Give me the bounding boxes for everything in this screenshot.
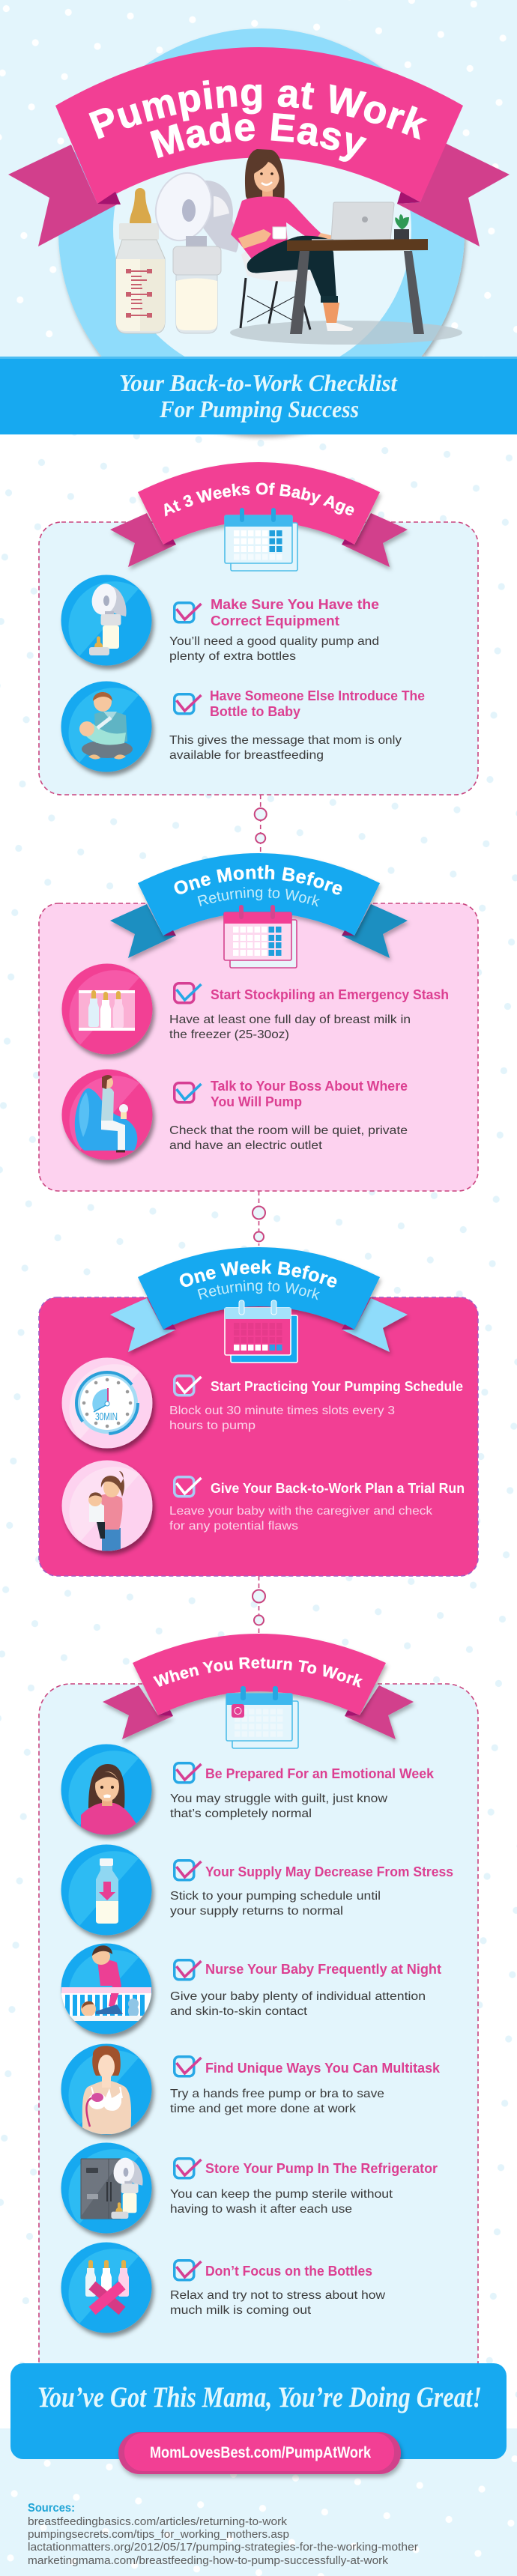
- item body: for any potential flaws: [169, 1520, 298, 1533]
- checkbox: [175, 984, 201, 1003]
- ribbon tail right: [397, 143, 510, 246]
- item body: [170, 1890, 381, 1918]
- item body: the freezer (25-30oz): [169, 1028, 289, 1041]
- checkbox: [175, 2261, 201, 2280]
- background: footer area: [0, 2428, 517, 2576]
- checkbox: [175, 1763, 201, 1783]
- item heading: [211, 597, 379, 628]
- closing banner: [10, 2363, 507, 2474]
- checkbox: [175, 2057, 201, 2076]
- section ribbon: Returning to Work: [198, 887, 320, 906]
- icon: father feeding baby: [61, 682, 151, 772]
- icon: refrigerator and pump: [61, 2142, 151, 2234]
- item body: that’s completely normal: [170, 1807, 312, 1820]
- link button: MomLovesBest.com/PumpAtWork: [150, 2444, 371, 2461]
- section ribbon: [110, 1247, 409, 1356]
- sources: breastfeedingbasics.com/articles/returning-to-work: [28, 2515, 288, 2528]
- connector 3: [253, 1576, 265, 1634]
- item body: Relax and try not to stress about how: [170, 2289, 385, 2302]
- icon: worried mother: [61, 1744, 151, 1836]
- icon: bottle with down arrow: [61, 1844, 151, 1936]
- section 1: at 3 weeks: [38, 462, 479, 795]
- ribbon main band: [55, 47, 463, 204]
- item body: [169, 1124, 408, 1152]
- item body: Try a hands free pump or bra to save: [170, 2088, 384, 2100]
- item heading: Make Sure You Have the: [211, 597, 379, 612]
- checkbox: [175, 1960, 201, 1980]
- icon: mother with child: [61, 1461, 153, 1552]
- section ribbon: [110, 462, 409, 571]
- subtitle band: [0, 357, 517, 434]
- illustration: baby bottle: [116, 188, 165, 333]
- item heading: Find Unique Ways You Can Multitask: [205, 2061, 441, 2076]
- item body: [170, 2289, 385, 2317]
- icon: mother at crib: [61, 1943, 151, 2036]
- item heading: Don’t Focus on the Bottles: [205, 2264, 372, 2279]
- item heading: [210, 688, 425, 719]
- icon: woman on beanbag: [61, 1070, 153, 1160]
- item body: [170, 2188, 393, 2216]
- item body: [169, 1505, 433, 1533]
- checkbox: [175, 1861, 201, 1880]
- item body: [169, 734, 402, 762]
- sources: [28, 2502, 418, 2567]
- item body: and have an electric outlet: [169, 1139, 323, 1152]
- item heading: Talk to Your Boss About Where: [211, 1079, 408, 1094]
- subtitle band: For Pumping Success: [159, 396, 359, 422]
- item body: Check that the room will be quiet, private: [169, 1124, 408, 1137]
- item heading: Correct Equipment: [211, 613, 339, 628]
- item heading: You Will Pump: [211, 1094, 302, 1109]
- item body: You’ll need a good quality pump and: [169, 635, 379, 648]
- item body: You may struggle with guilt, just know: [170, 1792, 387, 1805]
- sources: Sources:: [28, 2502, 75, 2515]
- ribbon tail left: [8, 145, 118, 246]
- item body: This gives the message that mom is only: [169, 734, 402, 747]
- checkbox: [175, 603, 201, 622]
- item body: Have at least one full day of breast milk in: [169, 1013, 411, 1026]
- item heading: Your Supply May Decrease From Stress: [205, 1864, 453, 1879]
- background: middle white area: [0, 434, 517, 2428]
- item body: time and get more done at work: [170, 2103, 357, 2115]
- title ribbon: [8, 47, 510, 246]
- hero illustration backdrop circles: [58, 28, 465, 434]
- sources: marketingmama.com/breastfeeding-how-to-pump-successfully-at-work: [28, 2554, 389, 2567]
- section 4: when you return to work: [38, 1634, 479, 2363]
- item body: Block out 30 minute times slots every 3: [169, 1404, 395, 1417]
- item body: [169, 635, 379, 663]
- ribbon text: One Month Before: [174, 864, 342, 894]
- clock label: 30MIN: [95, 1410, 118, 1423]
- checkbox: [175, 1376, 201, 1395]
- item body: Leave your baby with the caregiver and check: [169, 1505, 433, 1518]
- section ribbon: Returning to Work: [198, 1280, 320, 1300]
- item heading: [211, 1079, 408, 1109]
- icon: hands-free pumping: [61, 2043, 151, 2135]
- checkbox: [175, 1477, 201, 1497]
- sources: lactationmatters.org/2012/05/17/pumping-strategies-for-the-working-mother: [28, 2541, 418, 2554]
- item body: and skin-to-skin contact: [170, 2005, 308, 2018]
- item heading: Nurse Your Baby Frequently at Night: [205, 1962, 441, 1977]
- background: top hero area: [0, 0, 517, 434]
- calendar icon: [225, 508, 297, 571]
- calendar icon: [224, 905, 297, 968]
- item body: hours to pump: [169, 1419, 256, 1432]
- checkbox: [175, 694, 201, 714]
- item body: having to wash it after each use: [170, 2203, 352, 2216]
- illustration: mother at desk: [231, 149, 428, 334]
- item body: You can keep the pump sterile without: [170, 2188, 393, 2201]
- icon: 30 minute clock: [61, 1357, 153, 1449]
- icon: pump and bottle: [61, 575, 151, 665]
- ribbon text: At 3 Weeks Of Baby Age: [164, 482, 354, 517]
- item body: Stick to your pumping schedule until: [170, 1890, 381, 1903]
- item heading: Bottle to Baby: [210, 704, 300, 719]
- item body: plenty of extra bottles: [169, 650, 296, 663]
- icon: bottles crossed out: [61, 2243, 151, 2333]
- item body: available for breastfeeding: [169, 749, 324, 762]
- ribbon text: When You Return To Work: [153, 1657, 363, 1688]
- calendar icon: [225, 1300, 297, 1363]
- sources: pumpingsecrets.com/tips_for_working_mothers.asp: [28, 2528, 289, 2541]
- item body: much milk is coming out: [170, 2304, 312, 2317]
- item body: [170, 1990, 426, 2018]
- checkbox: [175, 2159, 201, 2178]
- panel: [39, 1684, 478, 2433]
- section ribbon: [110, 853, 409, 962]
- title text: Pumping at Work: [88, 79, 428, 140]
- link button: [118, 2432, 401, 2474]
- item body: Give your baby plenty of individual attention: [170, 1990, 426, 2003]
- section 2: one month before: [38, 853, 479, 1192]
- item body: [169, 1404, 395, 1432]
- connector 2: [253, 1191, 265, 1246]
- item body: [169, 1013, 411, 1041]
- item heading: Start Stockpiling an Emergency Stash: [211, 987, 449, 1002]
- item heading: Give Your Back-to-Work Plan a Trial Run: [211, 1481, 465, 1496]
- item body: your supply returns to normal: [170, 1905, 343, 1918]
- item heading: Store Your Pump In The Refrigerator: [205, 2161, 438, 2176]
- title ribbon: Made Easy: [150, 112, 367, 162]
- item heading: Have Someone Else Introduce The: [210, 688, 425, 703]
- item heading: Be Prepared For an Emotional Week: [205, 1766, 435, 1781]
- icon: milk stash shelf: [61, 963, 153, 1055]
- item body: [170, 1792, 387, 1820]
- ribbon text: One Week Before: [180, 1260, 337, 1288]
- panel: [39, 522, 478, 795]
- calendar icon: [226, 1686, 298, 1748]
- panel: [39, 903, 478, 1191]
- subtitle text: Your Back-to-Work Checklist: [119, 369, 398, 396]
- ribbon folds: [97, 192, 420, 204]
- connector 1: [255, 795, 267, 853]
- section ribbon: [103, 1634, 415, 1744]
- panel: [39, 1297, 478, 1576]
- item body: [170, 2088, 384, 2115]
- item heading: Start Practicing Your Pumping Schedule: [211, 1379, 463, 1394]
- checkbox: [175, 1083, 201, 1103]
- section 3: one week before: [38, 1247, 479, 1577]
- illustration: breast pump: [148, 166, 238, 333]
